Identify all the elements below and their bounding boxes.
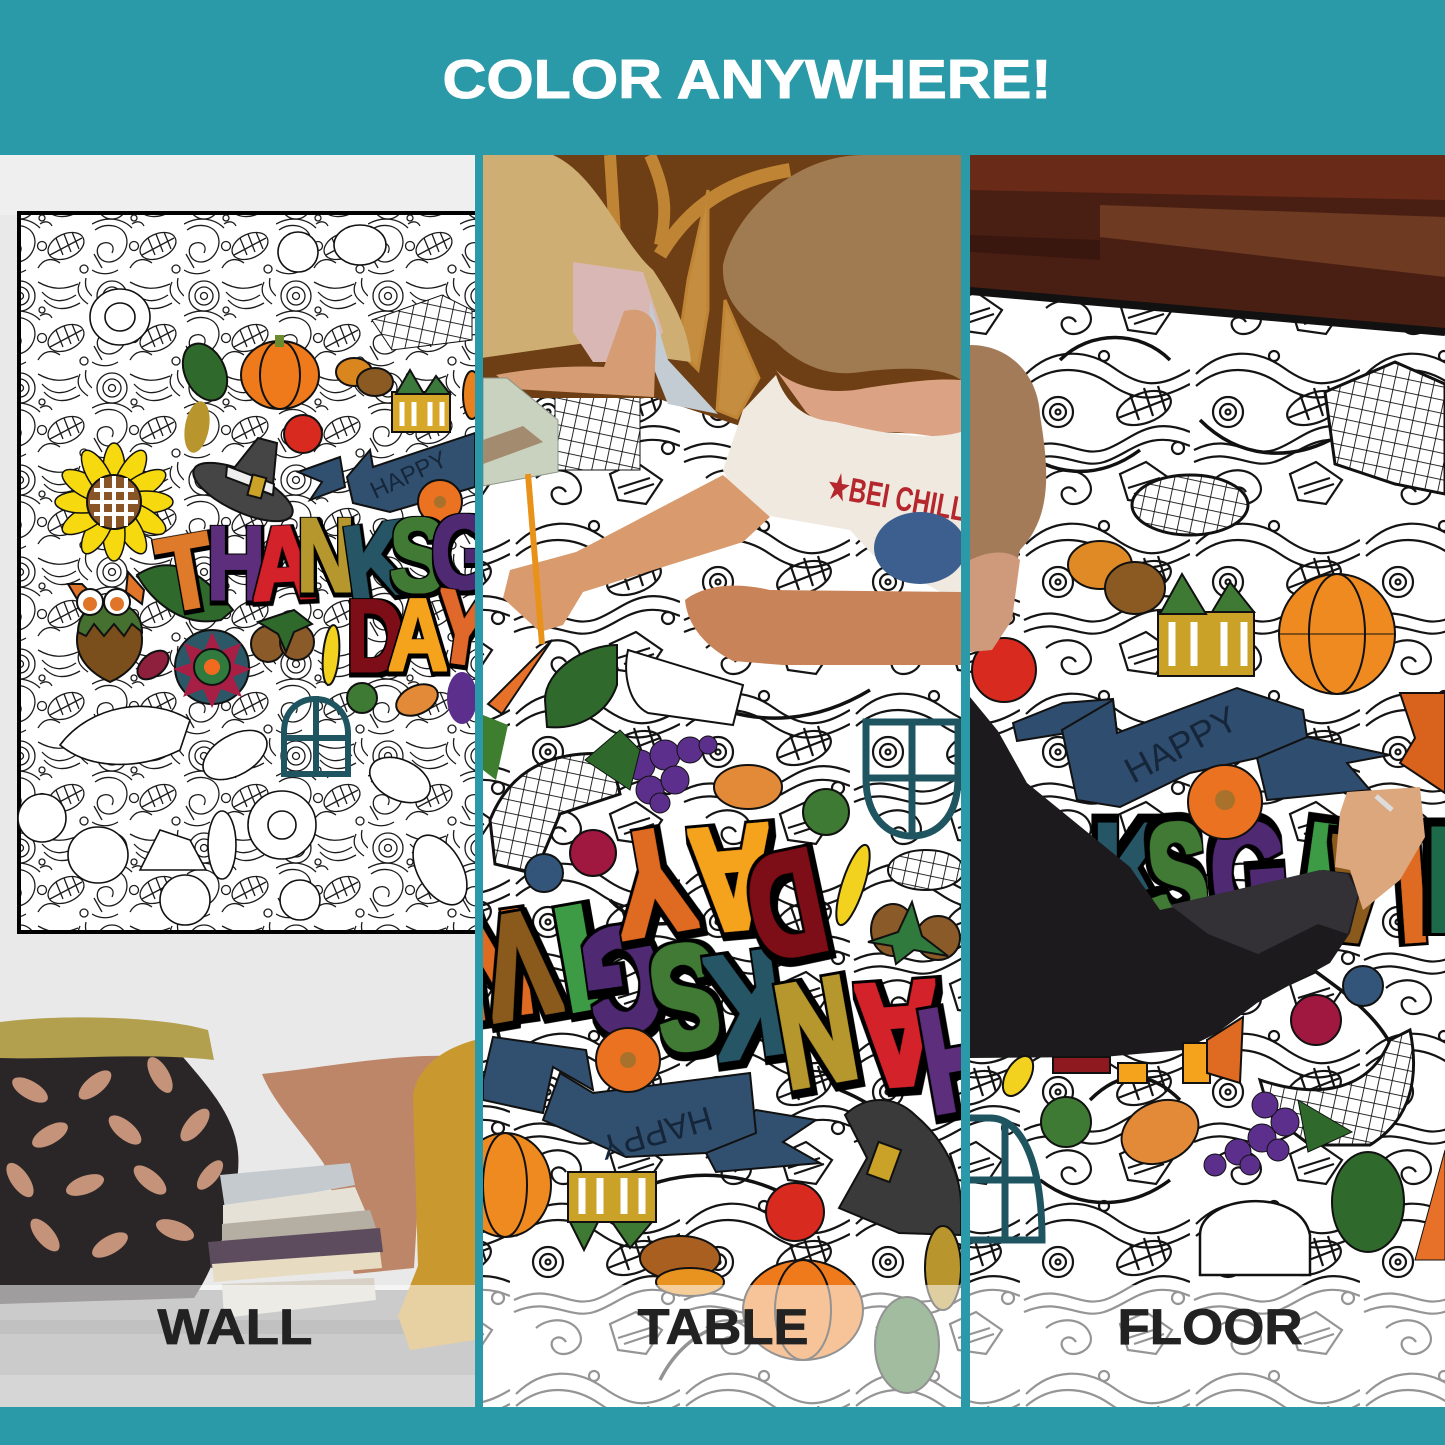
crayon box (483, 378, 558, 486)
cake (1200, 1201, 1310, 1275)
basket leaf print (1, 1053, 228, 1263)
wheat (320, 624, 342, 686)
owl (68, 572, 144, 682)
autumn leaves (640, 1236, 724, 1296)
upside-down letters: D (733, 818, 839, 993)
autumn leaves (336, 358, 393, 396)
window (284, 696, 348, 774)
letters: S (1143, 792, 1213, 959)
cake (626, 650, 743, 725)
ribbon: happy: HAPPY (366, 446, 451, 505)
label strip: wall (0, 1285, 475, 1407)
spinach (1332, 1152, 1404, 1252)
window (866, 722, 958, 836)
upside-down letters: K (699, 919, 793, 1090)
hazelnuts (868, 902, 960, 964)
apple (766, 1183, 824, 1241)
small food (347, 672, 477, 724)
panel: table (483, 155, 961, 1407)
letters: I (1391, 808, 1433, 973)
day letters: A (388, 578, 448, 692)
wood floor (970, 155, 1445, 335)
swirl strokes (496, 688, 871, 1381)
boy arm pencil hand (503, 475, 770, 632)
person arm sweater (970, 697, 1360, 1058)
spinach (545, 645, 617, 727)
pumpkin (1279, 574, 1395, 694)
girl (481, 155, 718, 414)
label strip: floor (970, 1285, 1445, 1407)
thanksgiving letters: A (248, 505, 318, 623)
leaves cluster (1068, 541, 1165, 614)
label strip: wall: WALL (158, 1299, 312, 1355)
title: COLOR ANYWHERE! (442, 48, 1052, 110)
basket (0, 1041, 238, 1304)
yellow leaf (184, 401, 210, 453)
pencil (528, 474, 542, 644)
pumpkin left (459, 1133, 551, 1237)
blanket (0, 1017, 214, 1060)
panel: wall (0, 155, 498, 1407)
leaf green (182, 342, 228, 402)
spiral (1041, 1097, 1091, 1147)
orange k (1400, 693, 1445, 793)
houses (1158, 574, 1254, 676)
panel: floor (970, 155, 1445, 1407)
thanksgiving letters: G (431, 495, 497, 611)
label strip: table: TABLE (638, 1299, 808, 1355)
red leaf (136, 650, 170, 680)
thanksgiving letters (150, 512, 475, 616)
chair spindles (610, 155, 790, 418)
orange flower (418, 480, 462, 524)
day letters (349, 588, 475, 678)
boy face (776, 370, 961, 440)
poster on wall (17, 211, 498, 934)
pumpkin (241, 335, 319, 409)
boy shirt (723, 375, 969, 597)
checkered cloth (1325, 362, 1445, 494)
letters: I (1290, 792, 1347, 959)
lower letters (1053, 1017, 1243, 1083)
pilgrim hat (192, 436, 294, 522)
upside-down letters: V (471, 879, 569, 1052)
thanksgiving letters: T (150, 512, 223, 634)
pie (1132, 475, 1248, 535)
green spiral (803, 789, 849, 835)
boy hair (723, 155, 961, 380)
day letters: D (346, 580, 404, 693)
label strip: table (483, 1285, 961, 1407)
cornucopia (490, 754, 620, 874)
houses (568, 1172, 656, 1250)
bottom pumpkin (743, 1260, 863, 1360)
ribbon: HAPPY (1118, 698, 1244, 791)
swirl strokes (1010, 338, 1400, 1202)
hat (839, 1100, 961, 1235)
label strip: floor: FLOOR (1118, 1299, 1302, 1355)
rose (570, 830, 616, 876)
armchair (398, 1040, 475, 1350)
person head (970, 345, 1046, 650)
orange leaf right edge (462, 370, 475, 420)
thanksgiving letters: K (337, 499, 416, 623)
upside-down letters: Y (599, 794, 704, 969)
letters: G (1206, 793, 1294, 960)
upside-down letters: N (444, 880, 542, 1051)
orange flower (1188, 765, 1262, 839)
grapes (625, 736, 717, 813)
window (970, 1118, 1042, 1240)
blue flower (1343, 966, 1383, 1006)
thanksgiving letters: S (390, 498, 446, 614)
brown leaf (925, 1226, 961, 1310)
carrot right (1415, 1150, 1445, 1260)
carrot (488, 640, 552, 714)
floor (0, 1290, 475, 1407)
poster top edge (970, 291, 1445, 332)
upside-down letters: N (765, 946, 868, 1119)
acorns (251, 610, 314, 662)
orange drumstick (714, 765, 782, 809)
wheat yellow (997, 1051, 1039, 1101)
grid doodle (555, 395, 640, 470)
letters: V (1319, 807, 1393, 974)
apple (972, 638, 1036, 702)
upside-down letters: A (851, 950, 945, 1119)
orange flower (596, 1028, 660, 1092)
thanksgiving letters: H (207, 505, 265, 621)
rose (1291, 995, 1341, 1045)
leaf branch (137, 565, 233, 621)
sunflower (55, 443, 173, 561)
book stack (208, 1163, 383, 1318)
boy shirt: ★BEI CHILL (825, 467, 969, 529)
grape leaf (1298, 1100, 1352, 1152)
hand (1335, 787, 1425, 910)
wheat (830, 842, 876, 928)
upside-down letters: I (543, 875, 611, 1042)
letters (1093, 792, 1445, 974)
ribbon (1013, 688, 1390, 807)
letters: K (1093, 794, 1167, 957)
carrot top (483, 715, 508, 780)
ribbon: happy (298, 433, 475, 512)
wood background (483, 155, 961, 435)
green leaf (875, 1297, 939, 1393)
apple (284, 415, 322, 453)
medallion (173, 630, 251, 708)
grapes (1204, 1092, 1299, 1176)
pen (1376, 796, 1392, 810)
corn (888, 850, 964, 890)
ribbon: happy upside down: HAPPY (595, 1098, 717, 1167)
outline doodles (18, 225, 478, 925)
blue flower (525, 854, 563, 892)
upside-down letters: S (642, 912, 730, 1082)
day letters: Y (427, 568, 498, 688)
ribbon: happy upside down (483, 1037, 820, 1172)
thanksgiving letters: N (297, 497, 355, 613)
houses (392, 370, 450, 432)
cornucopia (1260, 1030, 1414, 1145)
person neck (970, 552, 1020, 652)
drumstick (1111, 1088, 1209, 1176)
pillow (262, 1056, 452, 1274)
upside-down letters (444, 794, 1012, 1144)
upside-down letters: H (909, 971, 1012, 1144)
upside-down letters: G (572, 894, 672, 1066)
upside-down letters: A (684, 794, 780, 964)
cuff highlights (1170, 870, 1358, 954)
grape leaf (585, 730, 640, 790)
boy arm other hand (685, 586, 961, 665)
